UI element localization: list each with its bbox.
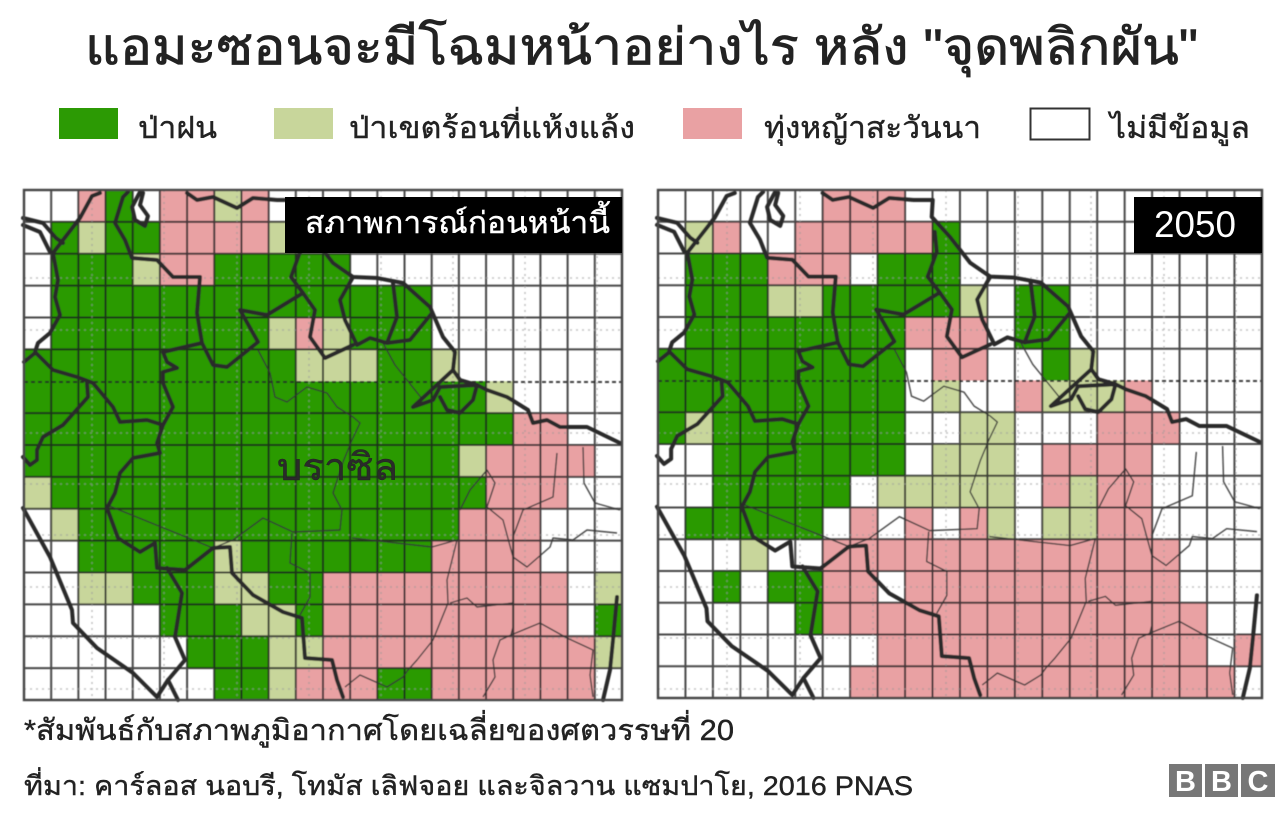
vegetation cells, previous conditions xyxy=(24,190,622,700)
country and state borders, 2050 xyxy=(657,192,1260,698)
panel: map, 2050 xyxy=(657,190,1262,698)
vegetation cells, 2050 xyxy=(658,190,1262,698)
BBC logo: B xyxy=(1211,766,1232,798)
label: 2050 xyxy=(1134,197,1262,253)
label: Brazil: บราซิล xyxy=(277,447,398,489)
label: previous conditions xyxy=(285,197,622,253)
map frame, 2050 xyxy=(658,190,1262,698)
legend: savanna: ทุ่งหญ้าสะวันนา xyxy=(764,112,981,147)
source: ที่มา: คาร์ลอส นอบรี, โทมัส เลิฟจอย และจิลวาน แซมปาโย, 2016 PNAS xyxy=(24,767,913,801)
label: previous conditions: สภาพการณ์ก่อนหน้านี้ xyxy=(305,201,610,240)
legend: no data: ไม่มีข้อมูล xyxy=(1108,110,1250,146)
label: 2050: 2050 xyxy=(1154,204,1236,245)
map base, 2050 xyxy=(657,190,1262,698)
legend: seasonal dry forest xyxy=(274,107,635,145)
panel: map, previous conditions xyxy=(23,190,622,700)
legend: rainforest: ป่าฝน xyxy=(138,112,217,145)
legend: rainforest xyxy=(59,108,217,145)
map frame xyxy=(24,190,622,700)
title: แอมะซอนจะมีโฉมหน้าอย่างไร หลัง "จุดพลิกผัน" xyxy=(85,19,1198,77)
map base, previous conditions xyxy=(23,190,622,700)
BBC logo xyxy=(1169,764,1275,798)
legend: no data xyxy=(1030,108,1250,146)
BBC logo: B xyxy=(1175,766,1196,798)
footnote: *สัมพันธ์กับสภาพภูมิอากาศโดยเฉลี่ยของศตวรรษที่ 20 xyxy=(24,710,734,748)
BBC logo: C xyxy=(1248,766,1269,798)
legend: savanna xyxy=(683,108,981,147)
country and state borders xyxy=(23,192,620,700)
legend: seasonal dry forest: ป่าเขตร้อนที่แห้งแล้ง xyxy=(349,107,635,145)
legend xyxy=(59,107,1250,147)
